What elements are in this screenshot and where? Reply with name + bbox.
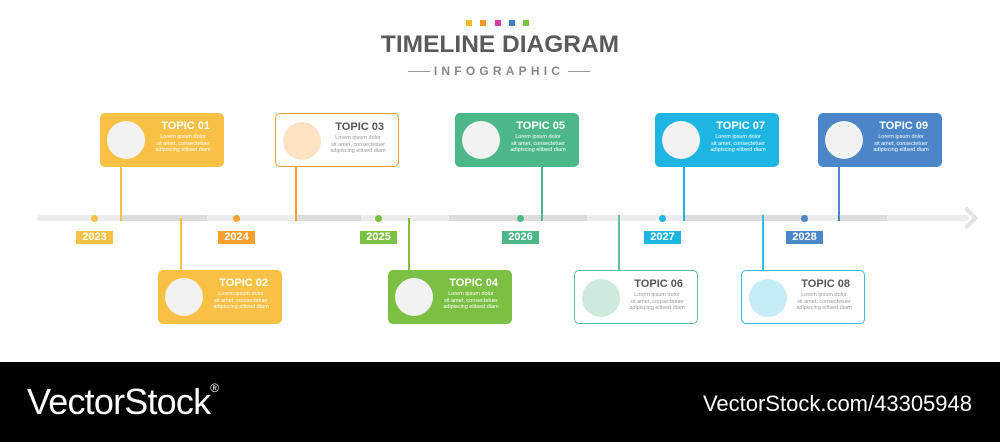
topic 07: adipiscing elitsed diam xyxy=(710,147,766,153)
topic 01: adipiscing elitsed diam xyxy=(155,147,211,153)
year 2025 xyxy=(360,231,397,244)
topic 05: adipiscing elitsed diam xyxy=(510,147,566,153)
topic 05: TOPIC 05 xyxy=(516,120,565,132)
topic 01: TOPIC 01 xyxy=(161,120,210,132)
topic 08: TOPIC 08 xyxy=(801,278,850,290)
year 2027 xyxy=(644,231,681,244)
topic 06: Lorem ipsum dolor xyxy=(634,292,680,298)
topic 01: Lorem ipsum dolor xyxy=(160,134,206,140)
topic 01 xyxy=(100,113,224,167)
topic 07: TOPIC 07 xyxy=(716,120,765,132)
topic 04: sit amet, consectetuer xyxy=(444,298,498,304)
topic 07: Lorem ipsum dolor xyxy=(715,134,761,140)
year 2025: 2025 xyxy=(366,231,391,243)
topic 01: sit amet, consectetuer xyxy=(156,141,210,147)
connectors xyxy=(120,167,122,221)
topic 03: Lorem ipsum dolor xyxy=(335,135,381,141)
topic 06 xyxy=(574,270,698,324)
topic 07 xyxy=(655,113,779,167)
year 2023: 2023 xyxy=(82,231,107,243)
title: TIMELINE DIAGRAM xyxy=(381,31,619,58)
topic 03: TOPIC 03 xyxy=(335,121,384,133)
year 2024 xyxy=(218,231,255,244)
topic 02 xyxy=(158,270,282,324)
topic 03: adipiscing elitsed diam xyxy=(330,148,386,154)
footer band xyxy=(0,362,1000,442)
topic 08 xyxy=(741,270,865,324)
topic 05: sit amet, consectetuer xyxy=(511,141,565,147)
year 2028: 2028 xyxy=(792,231,817,243)
year 2028 xyxy=(786,231,823,244)
topic 05 xyxy=(455,113,579,167)
topic 09: TOPIC 09 xyxy=(879,120,928,132)
topic 02: adipiscing elitsed diam xyxy=(213,304,269,310)
topic 02: TOPIC 02 xyxy=(219,277,268,289)
topic 02: Lorem ipsum dolor xyxy=(218,291,264,297)
topic 09: Lorem ipsum dolor xyxy=(878,134,924,140)
timeline xyxy=(37,207,978,229)
topic 03: sit amet, consectetuer xyxy=(331,142,385,148)
topic 08: adipiscing elitsed diam xyxy=(796,305,852,311)
topic 06: adipiscing elitsed diam xyxy=(629,305,685,311)
topic 09: adipiscing elitsed diam xyxy=(873,147,929,153)
topic 02: sit amet, consectetuer xyxy=(214,298,268,304)
subtitle: INFOGRAPHIC xyxy=(434,64,564,78)
topic 08: sit amet, consectetuer xyxy=(797,299,851,305)
year 2024: 2024 xyxy=(224,231,249,243)
topic 08: Lorem ipsum dolor xyxy=(801,292,847,298)
topic 05: Lorem ipsum dolor xyxy=(515,134,561,140)
topic 04 xyxy=(388,270,512,324)
year 2026: 2026 xyxy=(508,231,533,243)
footer logo: VectorStock® xyxy=(27,381,218,422)
topic 04: TOPIC 04 xyxy=(449,277,498,289)
dots and years xyxy=(91,215,98,222)
topic 06: TOPIC 06 xyxy=(634,278,683,290)
year 2026 xyxy=(502,231,539,244)
topic 09: sit amet, consectetuer xyxy=(874,141,928,147)
year 2023 xyxy=(76,231,113,244)
footer url: VectorStock.com/43305948 xyxy=(703,391,972,416)
topic 07: sit amet, consectetuer xyxy=(711,141,765,147)
topic 06: sit amet, consectetuer xyxy=(630,299,684,305)
topic 04: adipiscing elitsed diam xyxy=(443,304,499,310)
color squares xyxy=(466,20,529,26)
topic 03 xyxy=(275,113,399,167)
topic 04: Lorem ipsum dolor xyxy=(448,291,494,297)
year 2027: 2027 xyxy=(650,231,675,243)
topic 09 xyxy=(818,113,942,167)
